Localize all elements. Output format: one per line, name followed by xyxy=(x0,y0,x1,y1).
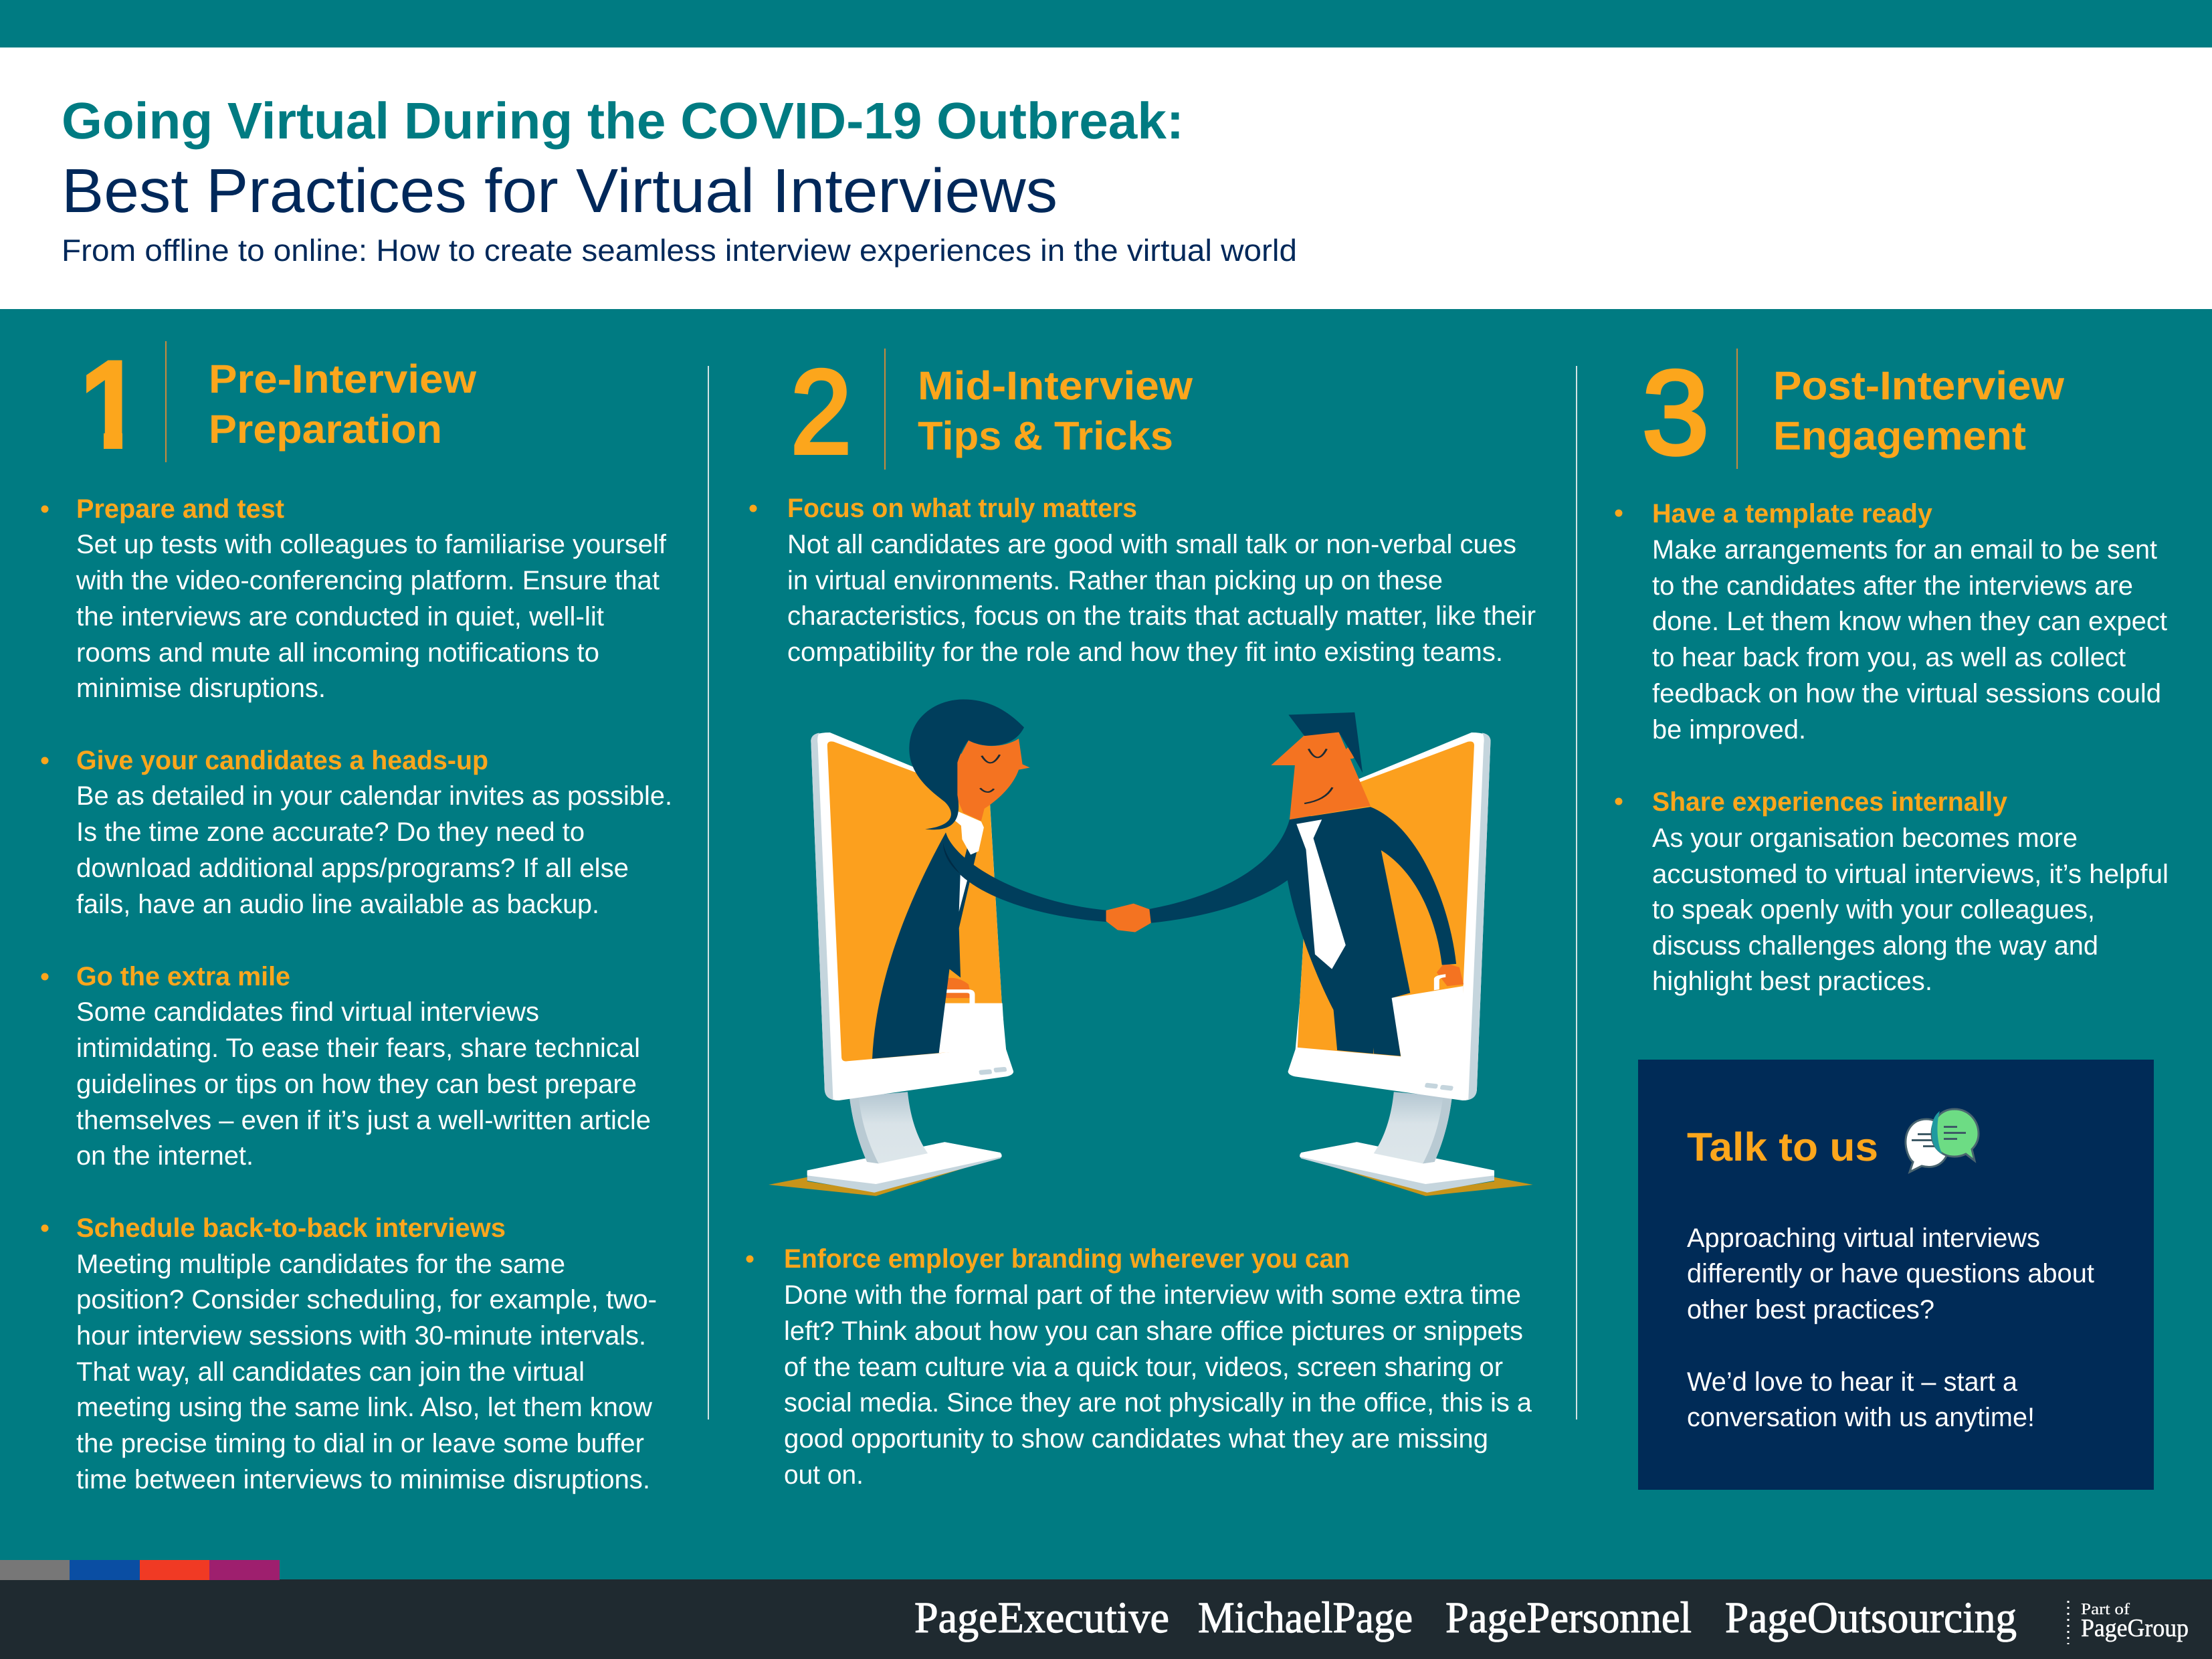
section 1 text: Schedule back-to-back interviews xyxy=(41,1213,657,1494)
section 1 heading: Preparation xyxy=(209,407,442,452)
section 3 heading xyxy=(1642,346,2064,479)
section 3 text: Have a template ready: feedback on how the virtual sessions could xyxy=(1652,679,2161,708)
section 3 text: Share experiences internally: As your organisation becomes more xyxy=(1652,823,2078,853)
talk to us text: conversation with us anytime! xyxy=(1687,1403,2035,1432)
section 3 text: Have a template ready: be improved. xyxy=(1652,715,1806,745)
section 1 text: Schedule back-to-back interviews: Meeting multiple candidates for the same xyxy=(76,1250,565,1279)
section 1 text: Give your candidates a heads-up: fails, have an audio line available as backup. xyxy=(76,890,599,919)
tagline: From offline to online: How to create seamless interview experiences in the virtual world xyxy=(62,233,1297,268)
section 3 text: Have a template ready: done. Let them know when they can expect xyxy=(1652,607,2167,636)
section 2 text: Enforce employer branding: of the team culture via a quick tour, videos, screen sharing or xyxy=(784,1353,1503,1382)
section 1 text: Schedule back-to-back interviews: hour interview sessions with 30-minute intervals. xyxy=(76,1321,646,1351)
section 2 text: Enforce employer branding: out on. xyxy=(784,1460,864,1490)
section 3 text: Have a template ready: Make arrangements for an email to be sent xyxy=(1652,535,2157,565)
talk to us text: other best practices? xyxy=(1687,1295,1934,1325)
section 1 text: Go the extra mile: intimidating. To ease their fears, share technical xyxy=(76,1034,640,1063)
section 2 text: Enforce employer branding: good opportunity to show candidates what they are missing xyxy=(784,1424,1488,1454)
section 3 text: Have a template ready: to hear back from you, as well as collect xyxy=(1652,643,2126,672)
talk to us text xyxy=(1687,1224,2094,1432)
section 1 text: Prepare and test: Set up tests with colleagues to familiarise yourself xyxy=(76,530,667,559)
talk to us text: Approaching virtual interviews xyxy=(1687,1224,2040,1253)
section 2 text: Enforce employer branding: left? Think about how you can share office pictures or snippets xyxy=(784,1316,1523,1346)
talk to us heading: Talk to us xyxy=(1687,1125,1878,1169)
section 2 heading: Mid-Interview xyxy=(918,363,1193,408)
section 3 heading: Post-Interview xyxy=(1773,363,2064,408)
section 1 heading xyxy=(86,341,476,462)
subtitle: Best Practices for Virtual Interviews xyxy=(62,156,1058,225)
section 1 text: Give your candidates a heads-up: Be as detailed in your calendar invites as possible. xyxy=(76,781,672,811)
man xyxy=(1148,712,1464,1062)
section 1 text: Prepare and test xyxy=(41,494,667,703)
icon: speech bubbles xyxy=(1906,1109,1979,1172)
section 3 text: Share experiences internally xyxy=(1615,787,2169,996)
section 3 heading: Engagement xyxy=(1773,413,2026,458)
logo: MichaelPage: MichaelPage xyxy=(1198,1593,1413,1642)
handshake xyxy=(1106,904,1151,932)
section 1 text: Prepare and test: Prepare and test xyxy=(76,494,284,524)
section 3 text: Share experiences internally: discuss challenges along the way and xyxy=(1652,931,2098,961)
title: Going Virtual During the COVID-19 Outbreak: xyxy=(62,92,1184,150)
section 1 text: Schedule back-to-back interviews: position? Consider scheduling, for example, two- xyxy=(76,1285,657,1314)
section 1 heading: Pre-Interview xyxy=(209,357,476,401)
left monitor xyxy=(769,733,1013,1196)
woman xyxy=(872,700,1107,1059)
section 1 text: Go the extra mile: themselves – even if it’s just a well-written article xyxy=(76,1106,651,1135)
section 3 text: Share experiences internally: accustomed to virtual interviews, it’s helpful xyxy=(1652,860,2169,889)
section 1 text: Go the extra mile: guidelines or tips on how they can best prepare xyxy=(76,1070,637,1099)
section 1 text: Schedule back-to-back interviews: That way, all candidates can join the virtual xyxy=(76,1357,585,1387)
section 2 text: Focus on what truly matters: characteristics, focus on the traits that actually matter, like their xyxy=(787,601,1536,631)
section 1 text: Go the extra mile: Some candidates find virtual interviews xyxy=(76,997,539,1027)
section 3 text: Share experiences internally: highlight best practices. xyxy=(1652,967,1932,996)
panel: talk to us xyxy=(1638,1060,2154,1490)
section 1 text: Go the extra mile: Go the extra mile xyxy=(76,962,290,991)
section 2 text: Enforce employer branding: Done with the formal part of the interview with some extra time xyxy=(784,1280,1521,1310)
section 2 text: Enforce employer branding xyxy=(746,1244,1532,1490)
section 2 text: Focus on what truly matters xyxy=(749,494,1536,667)
section 1 text: Give your candidates a heads-up: Is the time zone accurate? Do they need to xyxy=(76,817,585,847)
logo: PageOutsourcing: PageOutsourcing xyxy=(1725,1593,2017,1642)
section 2 text: Focus on what truly matters: in virtual environments. Rather than picking up on these xyxy=(787,566,1443,595)
section 1 text: Prepare and test: with the video-conferencing platform. Ensure that xyxy=(76,566,660,595)
section 3 text: Share experiences internally: to speak openly with your colleagues, xyxy=(1652,895,2095,924)
section 1 heading: 1 xyxy=(78,338,144,471)
section 2 text: Focus on what truly matters: compatibility for the role and how they fit into existing teams. xyxy=(787,638,1503,667)
section 2 text: Enforce employer branding: Enforce employer branding wherever you can xyxy=(784,1244,1350,1274)
section 2 heading: Tips & Tricks xyxy=(918,413,1173,458)
brand colour strip xyxy=(0,1560,280,1580)
section 1 text: Schedule back-to-back interviews: Schedule back-to-back interviews xyxy=(76,1213,506,1243)
header panel xyxy=(0,47,2212,309)
right monitor xyxy=(1288,733,1533,1196)
section 1 text: Go the extra mile xyxy=(41,962,651,1171)
section 1 text: Schedule back-to-back interviews: the precise timing to dial in or leave some buffer xyxy=(76,1429,644,1458)
section 2 heading: 2 xyxy=(791,345,851,478)
section 2 heading xyxy=(791,345,1193,478)
section 1 text: Prepare and test: rooms and mute all incoming notifications to xyxy=(76,638,599,668)
section 1 text: Prepare and test: minimise disruptions. xyxy=(76,674,326,703)
section 2 text: Focus on what truly matters: Focus on what truly matters xyxy=(787,494,1137,523)
logo: Part of PageGroup: Part of xyxy=(2081,1601,2130,1618)
logo: PageExecutive: PageExecutive xyxy=(914,1593,1169,1642)
section 1 text: Give your candidates a heads-up xyxy=(41,746,672,919)
logo: Part of PageGroup: PageGroup xyxy=(2081,1614,2189,1642)
section 2 text: Enforce employer branding: social media. Since they are not physically in the office, this is a xyxy=(784,1388,1532,1418)
column separators xyxy=(708,366,1577,1420)
logo: Part of PageGroup xyxy=(2068,1601,2189,1644)
section 3 text: Share experiences internally: Share experiences internally xyxy=(1652,787,2008,817)
section 3 text: Have a template ready xyxy=(1615,499,2167,745)
section 1 text: Schedule back-to-back interviews: meeting using the same link. Also, let them know xyxy=(76,1393,652,1422)
section 1 text: Give your candidates a heads-up: download additional apps/programs? If all else xyxy=(76,854,629,883)
section 3 text: Have a template ready: to the candidates after the interviews are xyxy=(1652,571,2133,601)
talk to us text: differently or have questions about xyxy=(1687,1259,2094,1288)
section 1 text: Schedule back-to-back interviews: time between interviews to minimise disruptions. xyxy=(76,1465,650,1494)
illustration: virtual handshake between two monitors xyxy=(769,700,1533,1196)
section 1 text: Give your candidates a heads-up: Give your candidates a heads-up xyxy=(76,746,488,775)
logo: PagePersonnel: PagePersonnel xyxy=(1445,1593,1692,1642)
section 3 heading: 3 xyxy=(1642,346,1709,479)
section 3 text: Have a template ready: Have a template ready xyxy=(1652,499,1933,528)
section 1 text: Go the extra mile: on the internet. xyxy=(76,1141,254,1171)
section 2 text: Focus on what truly matters: Not all candidates are good with small talk or non-verbal cues xyxy=(787,530,1516,559)
talk to us text: We’d love to hear it – start a xyxy=(1687,1367,2018,1397)
section 1 text: Prepare and test: the interviews are conducted in quiet, well-lit xyxy=(76,602,604,631)
footer bar xyxy=(0,1560,2212,1659)
